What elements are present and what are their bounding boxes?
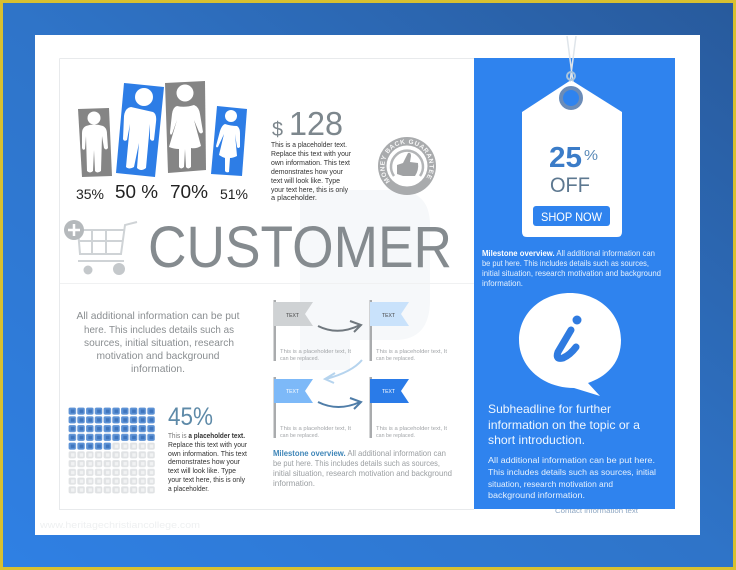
flag 3 (274, 377, 351, 439)
text block: additional information: All additional information can be put (76, 310, 240, 322)
flag 2: can be replaced. (376, 356, 415, 362)
text block: milestone overview: Milestone overview. All additional information can (273, 448, 446, 458)
price figure: $ (272, 119, 283, 141)
flag 4: TEXT (382, 389, 396, 395)
figure: woman grey (165, 81, 206, 173)
figure: man blue (116, 83, 164, 177)
people chart (76, 81, 248, 202)
flag 2: This is a placeholder text, It (376, 349, 447, 355)
subheadline: information on the topic or a (488, 418, 640, 432)
text: milestone overview: Milestone overview. All additional information can (482, 248, 655, 258)
price text (271, 140, 352, 202)
price text: demonstrates how your (271, 167, 344, 176)
price figure: 128 (289, 105, 343, 142)
white page panel (35, 35, 700, 535)
text block: milestone overview: information. (273, 478, 315, 488)
milestone flags (274, 300, 447, 439)
stat text: own information. This text (168, 449, 247, 458)
price text: Replace this text with your (271, 149, 352, 158)
text: milestone overview: be put here. This includes details such as sources, (482, 258, 649, 268)
price text: a placeholder. (271, 193, 317, 202)
flag 1 (274, 300, 351, 362)
price text: This is a placeholder text. (271, 140, 347, 149)
flag 1: can be replaced. (280, 356, 319, 362)
text block: milestone overview: be put here. This includes details such as sources, (273, 458, 440, 468)
icon: money back guarantee badge: MONEY BACK GUARANTEE (380, 139, 434, 184)
figure: woman blue (211, 106, 247, 176)
flag 4 (370, 377, 447, 439)
content guide lines (60, 58, 474, 510)
text: additional information: This includes details such as sources, initial (488, 467, 656, 477)
title: CUSTOMER (148, 215, 452, 280)
stat text: demonstrates how your (168, 457, 241, 466)
text block: additional information: motivation and background (96, 350, 220, 362)
icon: shopping cart (64, 220, 137, 275)
flag 2 (370, 300, 447, 362)
text: additional information: All additional information can be put here. (488, 455, 655, 465)
icon: price tag: % (584, 147, 598, 164)
arrow: flag 1 to flag 2 (318, 321, 361, 332)
text block: additional information (76, 310, 240, 375)
people chart: 50 % (115, 182, 158, 202)
text block: milestone overview: initial situation, research motivation and background (273, 468, 452, 478)
arrow: flag 3 to flag 4 (318, 398, 361, 409)
subheadline (488, 402, 640, 447)
text: milestone overview: information. (482, 278, 523, 288)
stat text: Replace this text with your (168, 440, 248, 449)
button: shop now: SHOP NOW (541, 210, 603, 224)
price text: own information. This text (271, 158, 350, 167)
panel: blue sidebar (474, 36, 675, 509)
percent labels: 35% (76, 186, 104, 202)
stat block: 45 percent (168, 403, 248, 493)
arrow: flag 2 to flag 3 (325, 360, 362, 383)
footer watermark: www.heritagechristiancollege.com (39, 520, 200, 531)
text: additional information (488, 455, 656, 500)
stat text: a placeholder. (168, 484, 209, 493)
icon: price tag: OFF (550, 174, 590, 197)
text block: additional information: information. (131, 363, 185, 375)
subheadline: Subheadline for further (488, 402, 611, 416)
text block: additional information: sources, initial situation, research (84, 337, 234, 349)
text: additional information: situation, research motivation and (488, 479, 613, 489)
stat text: your text here, this is only (168, 475, 245, 484)
people chart: 70% (170, 182, 208, 202)
figure: man grey (78, 108, 112, 177)
watermark logo (300, 190, 430, 370)
flag 4: can be replaced. (376, 433, 415, 439)
stat text (168, 431, 248, 493)
button: shop now (533, 206, 610, 226)
text: milestone overview (482, 248, 661, 288)
clipped text fragment below sidebar: Contact information text (555, 508, 638, 515)
stat text: This is a placeholder text. (168, 431, 245, 440)
flag 1: TEXT (286, 313, 300, 319)
flag 2: TEXT (382, 313, 396, 319)
waffle chart: 45 percent (68, 407, 156, 494)
subheadline: short introduction. (488, 433, 585, 447)
flag 3: TEXT (286, 389, 300, 395)
price text: text will look like. Type (271, 176, 340, 185)
stat figure: 45% (168, 403, 213, 431)
flag 3: can be replaced. (280, 433, 319, 439)
flag 1: This is a placeholder text, It (280, 349, 351, 355)
text block: milestone overview (273, 448, 452, 488)
text: milestone overview: initial situation, research motivation and background (482, 268, 661, 278)
icon: info speech bubble (519, 293, 621, 396)
text block: additional information: here. This includes details such as (84, 324, 234, 336)
price text: your text here, this is only (271, 185, 348, 194)
flag 4: This is a placeholder text, It (376, 426, 447, 432)
text: additional information: background information. (488, 490, 585, 500)
people chart: 51% (220, 186, 248, 202)
price block (271, 105, 352, 202)
icon: price tag (522, 36, 622, 237)
stat text: text will look like. Type (168, 466, 236, 475)
discount: 25 (549, 142, 582, 174)
flag 3: This is a placeholder text, It (280, 426, 351, 432)
